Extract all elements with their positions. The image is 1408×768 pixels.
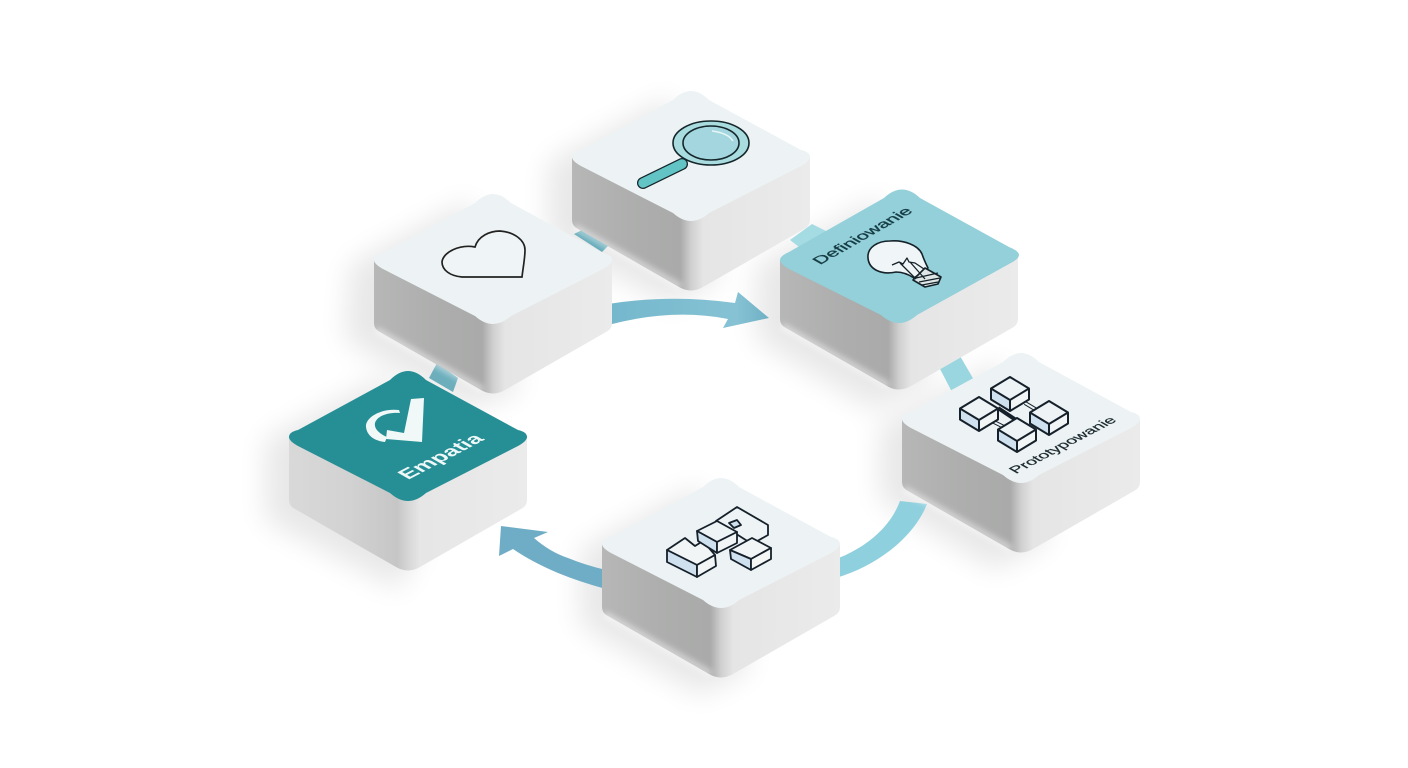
label: Prototypowanie: Prototypowanie xyxy=(1005,414,1120,476)
icon: heart xyxy=(442,231,525,277)
connector: heart to magnifier xyxy=(574,228,612,252)
icon: stacked blocks xyxy=(667,507,771,577)
block: magnifier xyxy=(572,91,810,290)
connector: empathy to heart xyxy=(429,363,458,392)
block: heart xyxy=(374,194,612,394)
icon: check mark with arc xyxy=(366,398,424,442)
block: empathy xyxy=(289,371,527,570)
connector: magnifier to definition xyxy=(790,224,828,250)
label: Definiowanie: Definiowanie xyxy=(809,205,917,267)
icon: light bulb xyxy=(868,241,941,287)
block: testing xyxy=(602,478,840,678)
block: prototyping xyxy=(902,353,1140,552)
icon: connected cubes xyxy=(960,377,1068,452)
arrow band: prototyping to test xyxy=(836,501,927,578)
block: definition xyxy=(780,190,1019,390)
arrow: heart to definition xyxy=(608,292,769,328)
icon: magnifying glass xyxy=(643,121,749,183)
label: Empatia: Empatia xyxy=(393,431,490,483)
connector: definition to prototyping xyxy=(938,356,974,392)
arrow: test to empathy xyxy=(499,526,606,589)
